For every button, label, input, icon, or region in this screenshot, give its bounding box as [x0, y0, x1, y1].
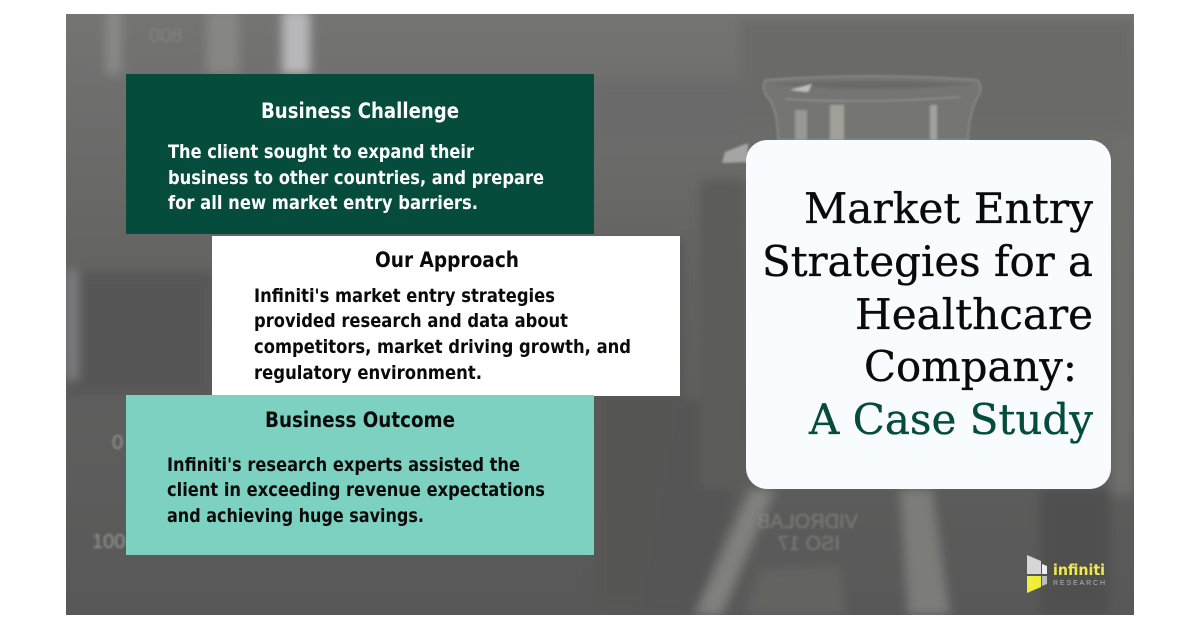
title: [762, 184, 1093, 391]
title: Strategies for a: [762, 237, 1093, 286]
text: logo tagline: RESEARCH: [1053, 580, 1105, 587]
text: our approach body: competitors, market driving growth, and: [254, 336, 631, 358]
heading: our approach: Our Approach: [375, 248, 519, 272]
title: Company:: [864, 342, 1077, 391]
text: business outcome body: and achieving huge savings.: [167, 505, 424, 527]
title: Market Entry: [804, 184, 1093, 233]
background etched labels: 100: [92, 531, 125, 553]
background flask neck: [722, 76, 981, 163]
subtitle: a case study: A Case Study: [808, 395, 1093, 444]
heading: business outcome: Business Outcome: [265, 408, 455, 432]
background etched labels: VIDROLAB: [757, 511, 858, 533]
text: our approach body: [254, 285, 631, 384]
text: business outcome body: Infiniti's research experts assisted the: [167, 454, 520, 476]
text: business challenge body: business to other countries, and prepare: [168, 167, 544, 189]
icon: logo mark: [1027, 555, 1047, 593]
panel: business outcome: [126, 395, 594, 555]
text: our approach body: regulatory environment.: [254, 362, 482, 384]
background etched labels: 0: [112, 432, 123, 454]
panel: our approach: [212, 236, 680, 396]
text: business outcome body: [167, 454, 545, 527]
text: our approach body: Infiniti's market entry strategies: [254, 285, 555, 307]
background etched labels: ISO 17: [778, 533, 840, 555]
panel: title card: [746, 140, 1111, 489]
text: logo wordmark: infiniti: [1053, 561, 1105, 579]
title: Healthcare: [855, 290, 1093, 339]
text: our approach body: provided research and data about: [254, 310, 568, 332]
background etched labels: [92, 25, 858, 555]
text: business challenge body: [168, 141, 544, 214]
text: business outcome body: client in exceeding revenue expectations: [167, 479, 545, 501]
heading: business challenge: Business Challenge: [261, 99, 459, 123]
panel: business challenge: [126, 74, 594, 234]
background etched labels: 008: [149, 25, 182, 47]
logo: infiniti research: [1027, 555, 1105, 593]
text: business challenge body: The client sought to expand their: [168, 141, 475, 163]
text: business challenge body: for all new market entry barriers.: [168, 192, 478, 214]
